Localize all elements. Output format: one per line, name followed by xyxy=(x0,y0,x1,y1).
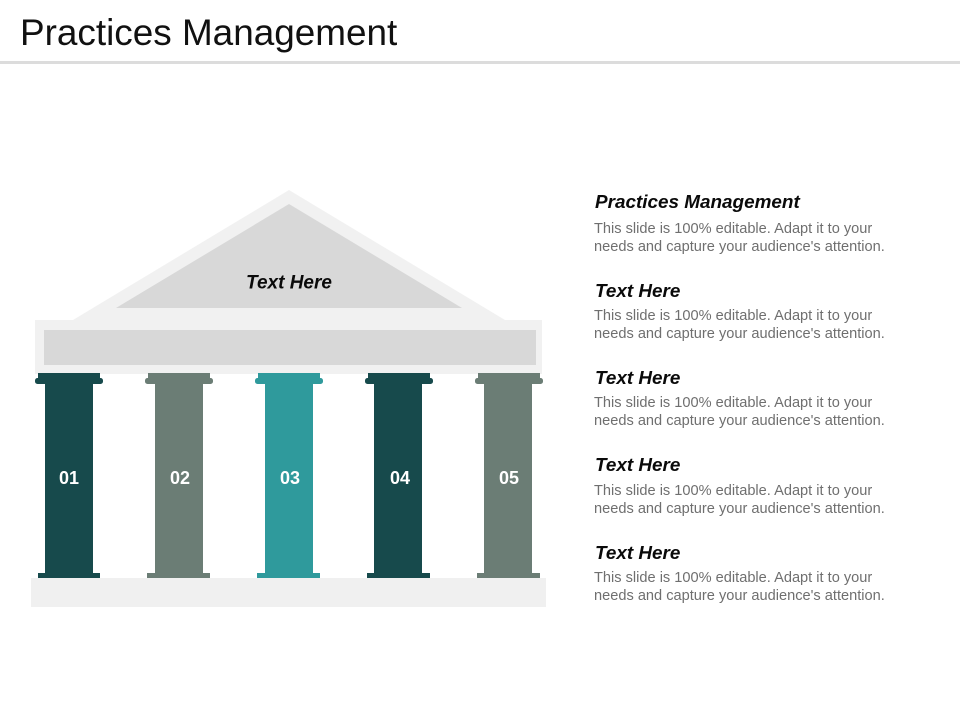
column 04 xyxy=(365,373,433,578)
frieze inner beam xyxy=(44,330,536,365)
column 05: 05 xyxy=(499,468,519,488)
item 4 heading: Text Here xyxy=(595,455,680,476)
item 5 heading: Text Here xyxy=(595,543,680,564)
roof label: Text Here xyxy=(246,272,332,294)
frieze outer beam xyxy=(35,320,542,374)
item 4 text: needs and capture your audience's attention. xyxy=(594,501,885,517)
item 1 text xyxy=(594,221,885,255)
column 01: 01 xyxy=(59,468,79,488)
item 2 text: This slide is 100% editable. Adapt it to your xyxy=(594,308,872,324)
item 2 text: needs and capture your audience's attention. xyxy=(594,326,885,342)
column 05 xyxy=(475,373,543,578)
item 3 text xyxy=(594,395,885,429)
item 3 text: This slide is 100% editable. Adapt it to your xyxy=(594,395,872,411)
column 02: 02 xyxy=(170,468,190,488)
title: Practices Management xyxy=(20,12,397,53)
item 4 text xyxy=(594,483,885,517)
item 4 text: This slide is 100% editable. Adapt it to your xyxy=(594,483,872,499)
item 5 text: needs and capture your audience's attention. xyxy=(594,588,885,604)
item 1 heading: Practices Management xyxy=(595,192,800,213)
item 1 text: This slide is 100% editable. Adapt it to your xyxy=(594,221,872,237)
item 2 text xyxy=(594,308,885,342)
item 1 text: needs and capture your audience's attention. xyxy=(594,239,885,255)
column 01 xyxy=(35,373,103,578)
column 04: 04 xyxy=(390,468,410,488)
column 03: 03 xyxy=(280,468,300,488)
column 02 xyxy=(145,373,213,578)
column 03 xyxy=(255,373,323,578)
roof: inner pediment xyxy=(116,204,462,308)
item 5 text xyxy=(594,570,885,604)
item 3 text: needs and capture your audience's attention. xyxy=(594,413,885,429)
item 2 heading: Text Here xyxy=(595,281,680,302)
item 5 text: This slide is 100% editable. Adapt it to your xyxy=(594,570,872,586)
roof: outer pediment xyxy=(73,190,505,320)
base platform xyxy=(31,578,546,607)
item 3 heading: Text Here xyxy=(595,368,680,389)
